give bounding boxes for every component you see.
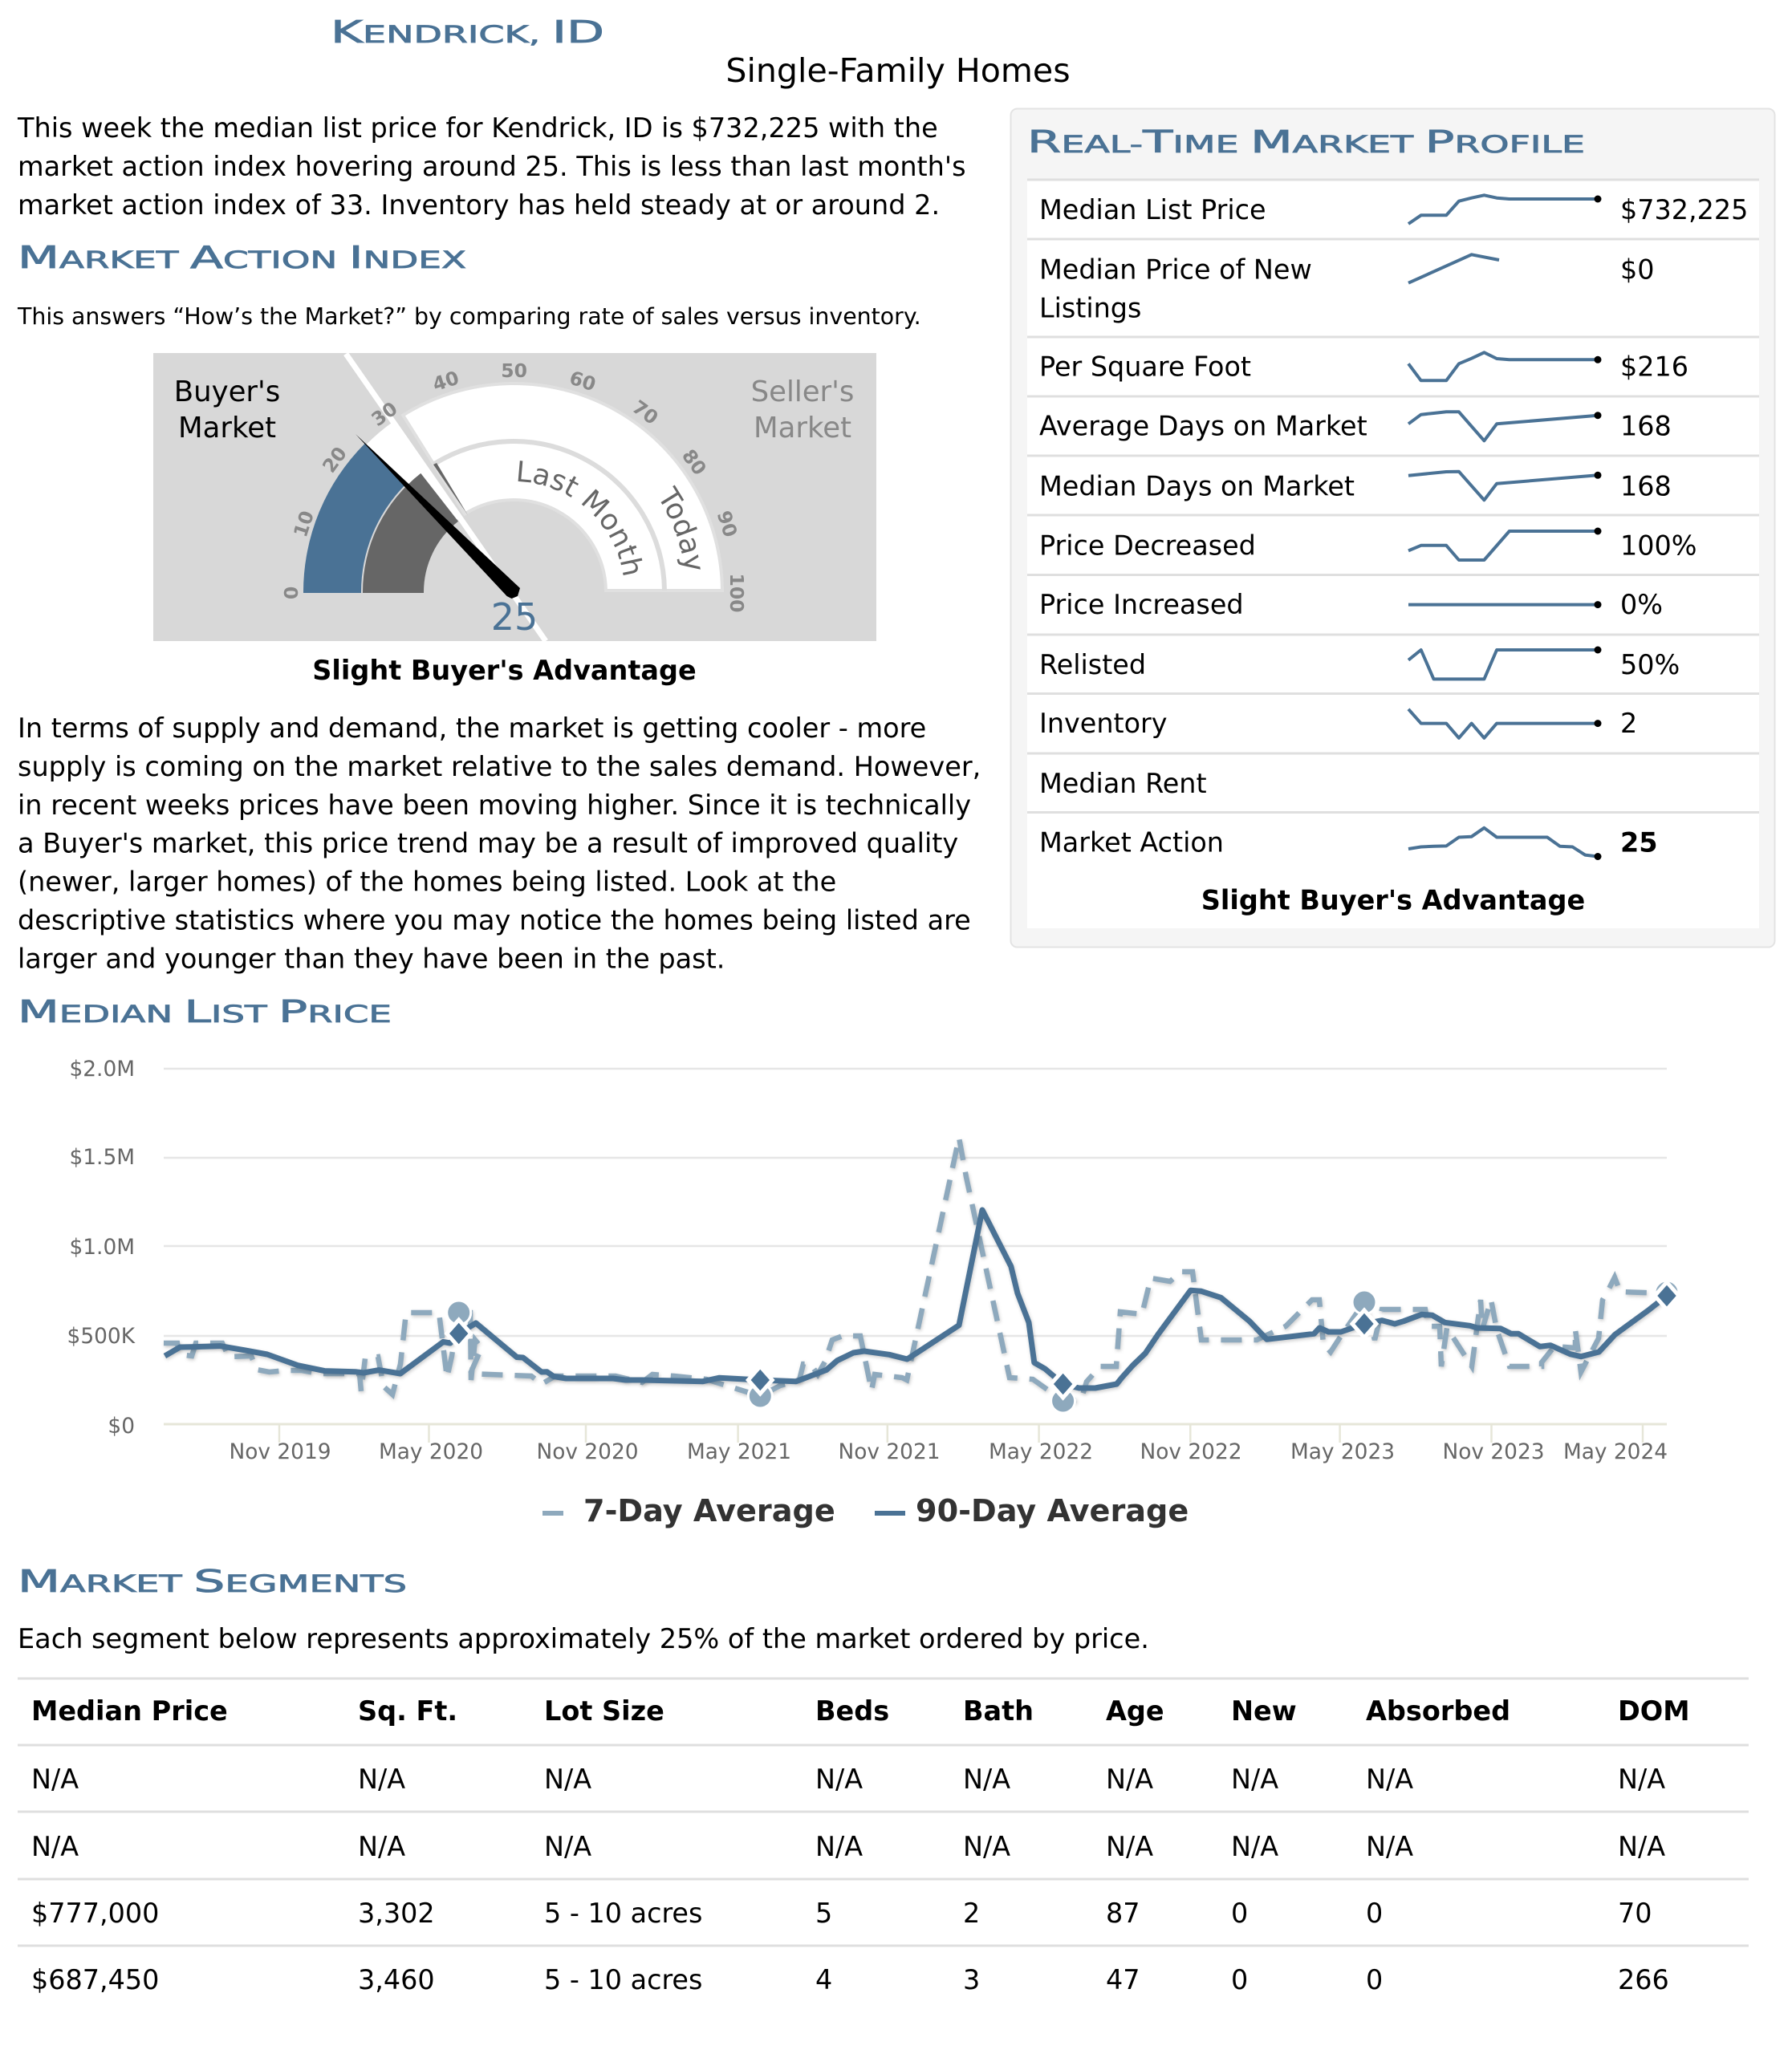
table row 1: N/A [31, 1764, 79, 1795]
gauge label: seller's market: Market [754, 412, 851, 444]
x axis labels: Nov 2020 [536, 1439, 639, 1464]
row: price increased: Price Increased [1039, 589, 1244, 620]
table row 4: 0 [1231, 1964, 1248, 1995]
gauge needle [356, 434, 520, 599]
row: median list price: $732,225 [1620, 194, 1748, 225]
supply and demand text block: (newer, larger homes) of the homes being listed. Look at the [18, 867, 836, 898]
table row 1: N/A [544, 1764, 591, 1795]
gauge tick labels: 30 [368, 397, 401, 431]
table row 2: N/A [963, 1831, 1010, 1862]
row: market action: 25 [1620, 826, 1658, 859]
supply and demand text block: descriptive statistics where you may notice the homes being listed are [18, 905, 971, 936]
gauge tick labels: 0 [280, 587, 303, 599]
y axis labels: $500K [67, 1324, 136, 1349]
table row 1: N/A [1231, 1764, 1278, 1795]
heading: median list price: M EDIAN L IST P RICE [18, 994, 392, 1030]
line chart: median list price [67, 1057, 1679, 1464]
row: price increased [1039, 589, 1663, 620]
heading: market segments: M ARKET S EGMENTS [18, 1564, 407, 1600]
gauge white band: seller's side [403, 384, 722, 591]
legend label: 90-day: 90-Day Average [916, 1494, 1189, 1529]
table row 3: $777,000 [31, 1898, 159, 1929]
supply and demand text block: supply is coming on the market relative to the sales demand. However, [18, 751, 981, 782]
table row 4: 3 [963, 1964, 980, 1995]
row: inventory [1039, 708, 1637, 739]
x axis labels: May 2024 [1563, 1439, 1668, 1464]
row: average days on market: Average Days on Market [1039, 411, 1367, 441]
x axis labels [229, 1439, 1668, 1464]
gauge tick labels: 90 [713, 508, 742, 540]
intro text block: market action index of 33. Inventory has held steady at or around 2. [18, 189, 940, 221]
markers: 90-day average high and low [447, 1282, 1679, 1398]
row: relisted [1039, 647, 1680, 680]
row: inventory: Inventory [1039, 708, 1167, 739]
row: median price of new listings [1039, 254, 1655, 324]
table row 3: 0 [1366, 1898, 1383, 1929]
table row 3: 2 [963, 1898, 980, 1929]
supply and demand text block [18, 712, 981, 974]
y axis labels: $2.0M [69, 1057, 135, 1082]
legend swatch: 7-day [542, 1511, 563, 1516]
table row 2: N/A [358, 1831, 405, 1862]
y axis labels: $1.0M [69, 1235, 135, 1260]
table row 4: 47 [1106, 1964, 1140, 1995]
y axis labels [67, 1057, 136, 1439]
intro text block [17, 112, 966, 221]
table row 1: N/A [1106, 1764, 1153, 1795]
title: K ENDRICK, ID [331, 14, 604, 51]
x axis labels: Nov 2019 [229, 1439, 331, 1464]
table row 2: N/A [544, 1831, 591, 1862]
table row 3: 87 [1106, 1898, 1140, 1929]
table row 1: N/A [1366, 1764, 1413, 1795]
row: per square foot: Per Square Foot [1039, 351, 1251, 382]
row: median list price [1039, 194, 1748, 225]
x axis labels: May 2023 [1290, 1439, 1395, 1464]
gauge label: buyer's market [174, 375, 280, 444]
table row 4: 4 [815, 1964, 832, 1995]
table row 4: $687,450 [31, 1964, 159, 1995]
row: median price of new listings: Median Price of New [1039, 254, 1312, 286]
x axis labels: May 2022 [989, 1439, 1093, 1464]
gauge tick labels: 70 [628, 396, 662, 429]
table row 1: N/A [815, 1764, 863, 1795]
row: price decreased: Price Decreased [1039, 530, 1256, 562]
table: market segments [18, 1679, 1749, 1995]
row: median days on market: 168 [1620, 470, 1672, 502]
row: price increased: 0% [1620, 589, 1663, 620]
gauge tick labels: 100 [725, 573, 748, 613]
row: per square foot [1039, 351, 1688, 382]
supply and demand text block: larger and younger than they have been in the past. [18, 943, 725, 974]
table header: Bath [963, 1695, 1034, 1727]
legend [542, 1494, 1189, 1529]
table header: New [1231, 1695, 1297, 1727]
table header: Median Price [31, 1695, 228, 1727]
gauge label: today: Today [661, 485, 701, 570]
table row 3: 0 [1231, 1898, 1248, 1929]
gauge tick labels: 80 [677, 445, 711, 479]
table row 4: 5 - 10 acres [544, 1964, 702, 1995]
table row 4 [31, 1964, 1669, 1995]
gauge white band: buyer's remainder [366, 422, 460, 527]
table row 2: N/A [1106, 1831, 1153, 1862]
table row 2: N/A [1231, 1831, 1278, 1862]
supply and demand text block: in recent weeks prices have been moving higher. Since it is technically [18, 790, 971, 821]
intro text block: This week the median list price for Kendrick, ID is $732,225 with the [17, 112, 938, 144]
table header [31, 1695, 1690, 1727]
legend swatch: 90-day [875, 1511, 905, 1516]
table header: Beds [815, 1695, 889, 1727]
table header: Absorbed [1366, 1695, 1510, 1727]
gauge last month needle [433, 463, 468, 515]
gauge label: seller's market [751, 375, 854, 444]
intro text block: market action index hovering around 25. This is less than last month's [18, 151, 966, 182]
table header: DOM [1618, 1695, 1690, 1727]
table row 2 [31, 1831, 1665, 1862]
table row 2: N/A [1366, 1831, 1413, 1862]
row: median price of new listings: Listings [1039, 292, 1141, 324]
row: average days on market: 168 [1620, 411, 1672, 441]
row: median rent: Median Rent [1039, 768, 1207, 799]
gauge divider ring [433, 441, 664, 591]
table header: Lot Size [544, 1695, 664, 1727]
row: market action: Market Action [1039, 826, 1224, 859]
table row 3: 3,302 [358, 1898, 435, 1929]
table header: Age [1106, 1695, 1164, 1727]
market segments description: Each segment below represents approximately 25% of the market ordered by price. [18, 1623, 1149, 1654]
market action description: This answers “How’s the Market?” by comparing rate of sales versus inventory. [17, 303, 921, 330]
table row 4: 3,460 [358, 1964, 435, 1995]
row: median price of new listings: $0 [1620, 254, 1655, 286]
supply and demand text block: a Buyer's market, this price trend may be a result of improved quality [18, 828, 958, 859]
series: 90-day average [165, 1210, 1667, 1388]
subtitle: Single-Family Homes [725, 51, 1071, 90]
gauge value: 25 [491, 595, 538, 639]
gauge today arc [303, 444, 406, 593]
gauge tick labels: 10 [289, 508, 319, 540]
gauge tick labels: 20 [318, 443, 351, 477]
table header: Sq. Ft. [358, 1695, 457, 1727]
heading: market action index: M ARKET A CTION INDEX [18, 240, 466, 276]
gauge last month arc [363, 473, 458, 593]
table row 4: 0 [1366, 1964, 1383, 1995]
table row 1: N/A [1618, 1764, 1665, 1795]
gauge label: seller's market: Seller's [751, 375, 854, 408]
gauge tick labels: 50 [501, 359, 527, 382]
table row 3: 5 - 10 acres [544, 1898, 702, 1929]
table row 1: N/A [963, 1764, 1010, 1795]
y axis labels: $0 [108, 1414, 135, 1439]
row: price decreased [1039, 528, 1697, 562]
supply and demand text block: In terms of supply and demand, the market is getting cooler - more [18, 712, 926, 744]
row: relisted: 50% [1620, 649, 1680, 680]
table row 3: 5 [815, 1898, 832, 1929]
gauge tick labels [280, 359, 748, 613]
row: relisted: Relisted [1039, 649, 1146, 680]
x axis labels: May 2021 [687, 1439, 791, 1464]
series: 7-day average [164, 1138, 1667, 1401]
gauge tick labels: 40 [430, 367, 461, 396]
gauge tick labels: 60 [567, 367, 599, 396]
panel heading: R EAL- T IME M ARKET P ROFILE [1027, 124, 1585, 160]
x axis labels: Nov 2021 [838, 1439, 941, 1464]
row: inventory: 2 [1620, 708, 1637, 739]
row: price decreased: 100% [1620, 530, 1697, 562]
x axis labels: Nov 2022 [1140, 1439, 1242, 1464]
row: market action [1039, 826, 1658, 860]
row: per square foot: $216 [1620, 351, 1688, 382]
row: average days on market [1039, 411, 1672, 441]
gauge caption: Slight Buyer's Advantage [312, 655, 697, 686]
table row 2: N/A [815, 1831, 863, 1862]
gauge label: buyer's market: Buyer's [174, 375, 280, 408]
table row 3 [31, 1898, 1652, 1929]
gauge label: last month: Last Month [518, 461, 642, 575]
panel: real-time market profile [1011, 109, 1775, 947]
table row 1: N/A [358, 1764, 405, 1795]
markers: 7-day average high and low [447, 1281, 1679, 1413]
table row 1 [31, 1764, 1665, 1795]
y axis labels: $1.5M [69, 1145, 135, 1170]
table row 2: N/A [31, 1831, 79, 1862]
row: median days on market [1039, 470, 1672, 502]
row: median days on market: Median Days on Market [1039, 470, 1355, 502]
gauge: market action index [153, 353, 876, 641]
x axis labels: Nov 2023 [1442, 1439, 1545, 1464]
gauge market boundary line [346, 354, 546, 641]
gauge label: buyer's market: Market [178, 412, 276, 444]
row: median list price: Median List Price [1039, 194, 1266, 225]
table row 3: 70 [1618, 1898, 1652, 1929]
panel caption: Slight Buyer's Advantage [1201, 884, 1585, 916]
legend label: 7-day: 7-Day Average [583, 1494, 835, 1529]
table row 4: 266 [1618, 1964, 1669, 1995]
x axis labels: May 2020 [379, 1439, 483, 1464]
table row 2: N/A [1618, 1831, 1665, 1862]
